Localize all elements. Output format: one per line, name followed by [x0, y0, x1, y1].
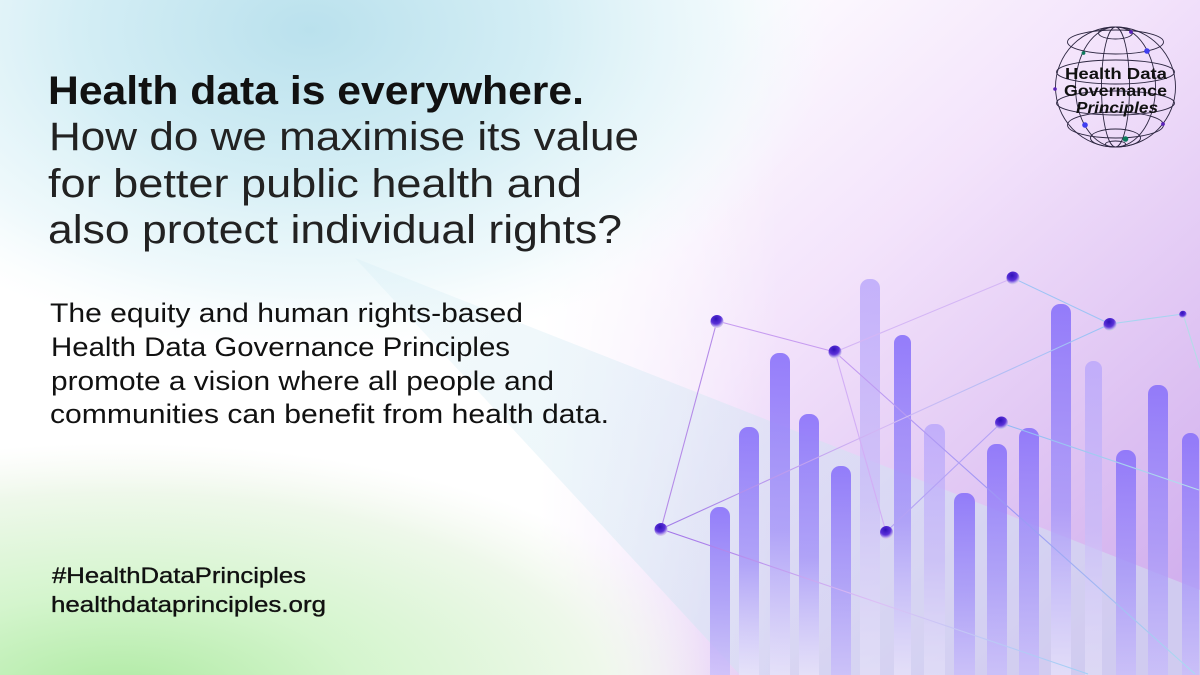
logo wordmark: Health Data	[1065, 66, 1167, 83]
logo wordmark: Governance	[1064, 83, 1167, 100]
title	[48, 69, 639, 252]
globe dots	[1053, 30, 1165, 142]
network lines	[661, 278, 1200, 674]
body text: communities can benefit from health data.	[50, 399, 609, 429]
title: for better public health and	[48, 162, 582, 206]
body text: Health Data Governance Principles	[51, 332, 510, 362]
logo wordmark: Principles	[1076, 100, 1158, 117]
title: How do we maximise its value	[49, 115, 639, 159]
body text: The equity and human rights-based	[50, 298, 523, 328]
network nodes	[654, 272, 1187, 539]
logo wordmark	[1064, 66, 1167, 117]
hashtag and website: #HealthDataPrinciples	[52, 563, 306, 588]
body text: promote a vision where all people and	[51, 366, 554, 396]
body text	[50, 298, 609, 429]
hashtag and website	[51, 563, 326, 617]
bar chart	[710, 279, 1199, 675]
logo: globe with title	[1053, 27, 1176, 147]
title: Health data is everywhere.	[48, 69, 584, 113]
hashtag and website: healthdataprinciples.org	[51, 592, 326, 617]
globe wireframe	[1056, 27, 1176, 147]
title: also protect individual rights?	[48, 208, 622, 252]
